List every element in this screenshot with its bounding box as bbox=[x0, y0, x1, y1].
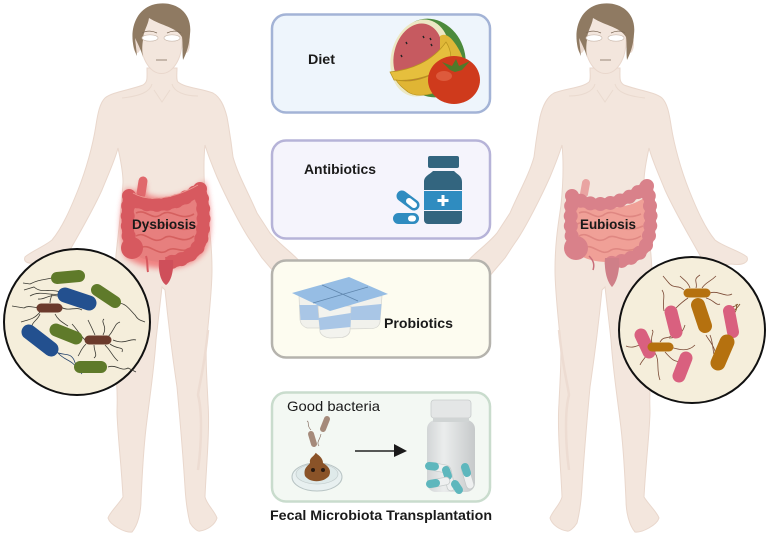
icon: yogurt cups bbox=[292, 277, 388, 338]
label: Diet bbox=[308, 51, 335, 67]
bacteria: blue bbox=[29, 295, 89, 349]
icon: bacteria bbox=[307, 419, 327, 446]
label: good bacteria: Good bacteria bbox=[287, 398, 380, 414]
panel: diet bbox=[272, 9, 490, 113]
label: eubiosis: Eubiosis bbox=[580, 216, 636, 232]
bacteria: green bbox=[56, 276, 115, 367]
label: Antibiotics bbox=[304, 161, 376, 177]
flagella bbox=[626, 275, 740, 380]
icon: petri dish with stool bbox=[292, 453, 342, 491]
icon: fruit bbox=[382, 9, 480, 107]
head bbox=[132, 3, 190, 73]
intestines: dysbiosis with red glow bbox=[121, 181, 207, 285]
figure: dysbiosis body bbox=[25, 3, 315, 532]
arrow bbox=[355, 444, 407, 457]
icon: pill bottle bbox=[424, 156, 462, 224]
label: dysbiosis: Dysbiosis bbox=[132, 216, 196, 232]
intestines: eubiosis bbox=[564, 183, 651, 287]
figure: eubiosis body bbox=[452, 3, 747, 532]
panel: antibiotics bbox=[272, 140, 490, 238]
flagella bbox=[12, 278, 145, 374]
panel: fecal microbiota transplantation bbox=[272, 392, 490, 502]
icon: capsule jar bbox=[427, 400, 475, 492]
bacteria: brown bbox=[41, 308, 107, 340]
panel: probiotics bbox=[272, 260, 490, 358]
icon: capsules bbox=[393, 196, 419, 224]
callout: dysbiosis bacteria circle bbox=[4, 249, 150, 395]
callout: eubiosis bacteria circle bbox=[619, 257, 765, 403]
bacteria: pink bbox=[641, 311, 733, 376]
caption: fecal microbiota transplantation: Fecal Microbiota Transplantation bbox=[270, 507, 492, 523]
label: Probiotics bbox=[384, 315, 453, 331]
head bbox=[576, 3, 634, 73]
bacteria: brown-orange bbox=[652, 293, 727, 363]
